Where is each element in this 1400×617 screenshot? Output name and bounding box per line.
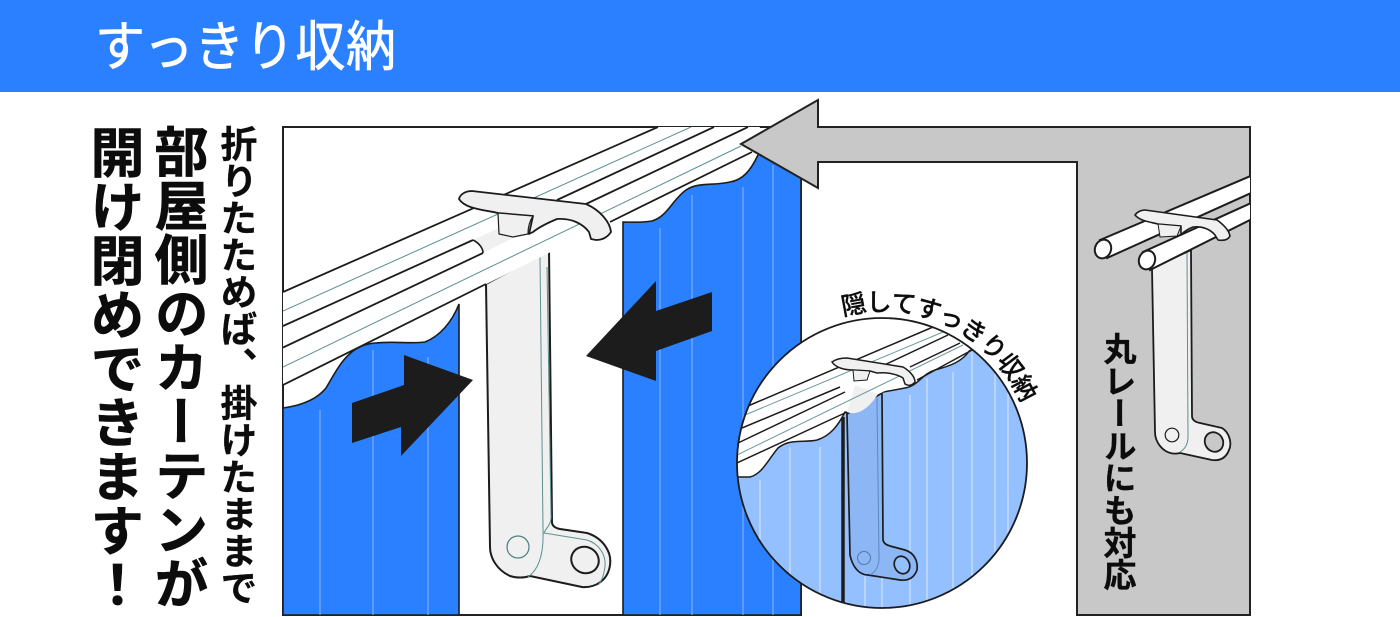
round rail hook bracket <box>1135 210 1230 240</box>
inset circle: hidden storage <box>736 290 1038 609</box>
right curtain <box>623 130 801 615</box>
header band <box>0 0 1400 92</box>
vertical text: column 3: 開け閉めできます！ <box>82 125 142 611</box>
round rail bracket arm <box>1152 250 1230 460</box>
vertical text: column 1: 折りたためば、掛けたままで <box>215 125 256 606</box>
left curtain <box>283 304 459 615</box>
curtain rail <box>283 127 760 385</box>
rail hook bracket <box>459 191 611 240</box>
arrow: right <box>352 355 473 456</box>
panel: main rail illustration <box>283 127 801 615</box>
inset arm <box>843 393 917 606</box>
wall bracket arm <box>486 250 610 587</box>
round rail caption: 丸レールにも対応 <box>1099 332 1136 590</box>
arrow: left <box>586 281 712 381</box>
title: すっきり収納 <box>95 17 397 77</box>
vertical text: column 2: 部屋側のカーテンが <box>146 124 206 610</box>
illustration <box>282 98 1251 616</box>
round rail rods <box>1094 176 1250 272</box>
inset rail <box>738 327 972 464</box>
inset curtain <box>738 350 1026 608</box>
inset hook bracket <box>832 358 915 385</box>
panel: gray elbow arrow with round rail <box>741 100 1260 615</box>
inset caption on arc: 隠してすっきり収納 <box>841 290 1038 402</box>
